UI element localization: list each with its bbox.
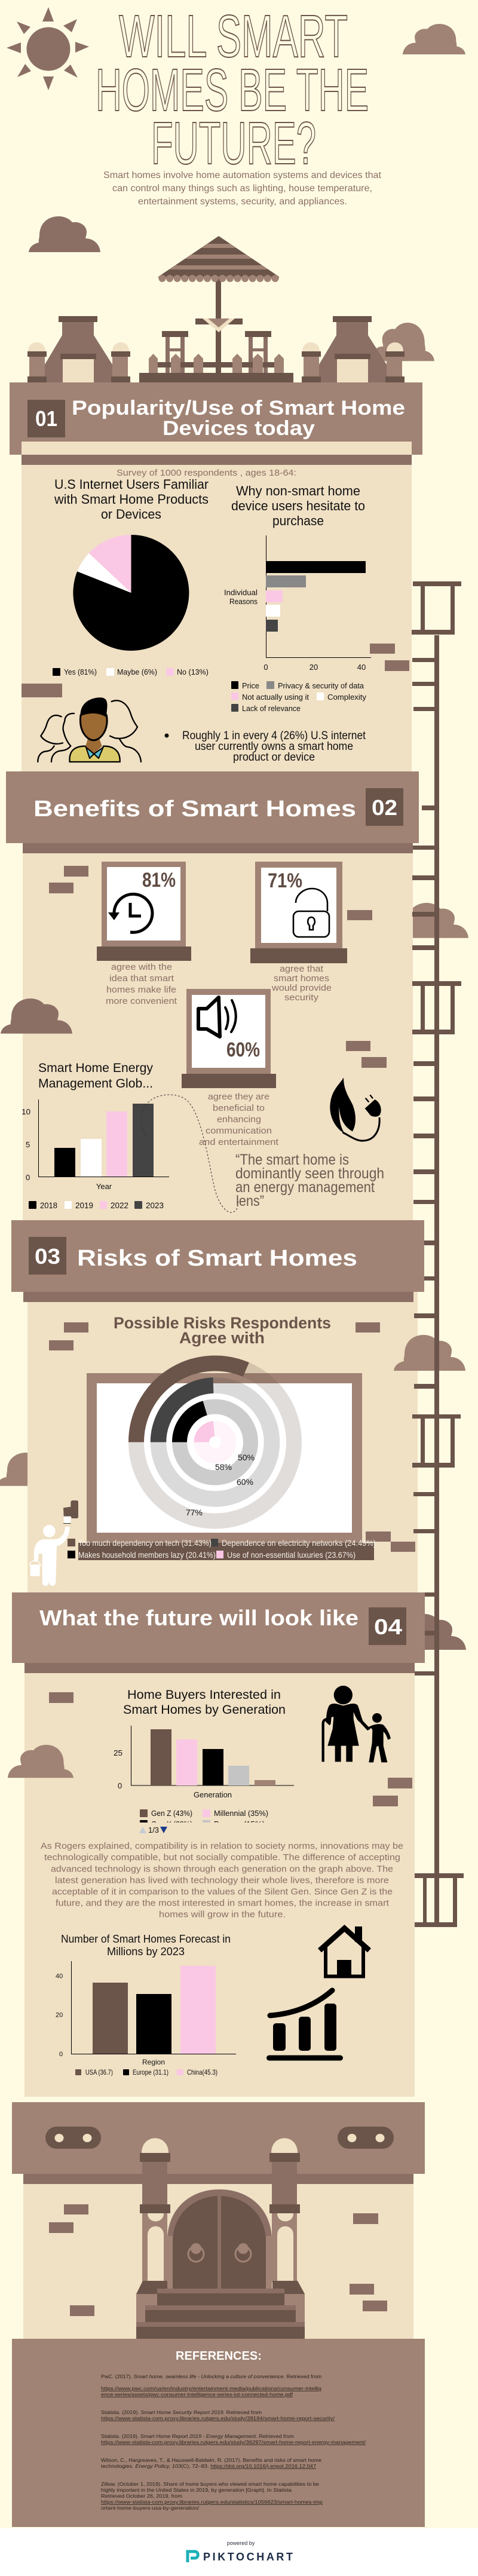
forecast chart legend: Europe (31.1) (133, 2068, 168, 2076)
door (167, 2189, 272, 2289)
risks heading: Agree with (179, 1329, 265, 1347)
quote: lens” (236, 1193, 264, 1209)
title: WILL SMART (119, 3, 348, 70)
bricks section 3 (49, 1322, 415, 1552)
generation chart legend: Boomer (15%) (214, 1820, 265, 1828)
pie legend: Yes (81%) (64, 667, 97, 676)
paragraph: compatibility: acceptable of it in comparison to the values of the Silent Gen. Since Gen Z is the (52, 1887, 393, 1897)
icon: clock (108, 894, 152, 932)
window: convenience 81% (97, 862, 191, 961)
generation chart legend (139, 1809, 268, 1834)
panel: references: Statista. (2019). Smart Home Report 2019 - Energy Management. Retrieved from (101, 2434, 294, 2439)
forecast chart title: Number of Smart Homes Forecast in (61, 1933, 231, 1945)
cloud behind wall 3 (0, 1453, 68, 1486)
forecast bar chart (56, 1961, 236, 2066)
text: entertainment (199, 1092, 279, 1147)
bar chart legend: Price (242, 681, 259, 690)
text: security (271, 964, 332, 1003)
window: convenience 81%: 81% (142, 869, 176, 892)
energy chart title (38, 1061, 154, 1091)
forecast chart legend: China(45.3) (187, 2068, 217, 2076)
panel: references: Retrieved October 26, 2019, from (101, 2494, 182, 2499)
bullet callout: Roughly 1 in every 4 (26%) U.S internet (182, 730, 366, 742)
panel: references: Statista. (2019). Smart Home Security Report 2019. Retrieved from (101, 2410, 262, 2415)
ornament vents (45, 2127, 394, 2149)
pillars (140, 2138, 300, 2282)
title (96, 3, 369, 177)
bar chart title: Why non-smart home (236, 483, 360, 498)
wall section 4 (24, 1663, 415, 2097)
wall section 1 (22, 442, 412, 776)
cloud left section 2 (1, 998, 72, 1034)
energy bar chart (22, 1099, 169, 1191)
forecast bar chart: Region (142, 2058, 165, 2066)
generation chart title (123, 1688, 286, 1717)
wall section 5 (23, 2174, 413, 2341)
bar chart: reasons: 40 (357, 663, 366, 672)
cloud behind right tower (370, 323, 434, 361)
panel: section 4 header: What the future will look like (39, 1606, 358, 1630)
icon: house (320, 1926, 369, 1978)
bar chart title (231, 483, 365, 528)
bricks section 5 (49, 2204, 387, 2316)
quote: dominantly seen through (235, 1165, 384, 1182)
energy chart legend (29, 1200, 164, 1210)
risks heading (114, 1314, 331, 1347)
intro text (103, 170, 382, 207)
text: security: would provide (271, 983, 332, 993)
radial chart legend: Makes household members lazy (20.41%) (78, 1550, 216, 1560)
text: security: agree that (280, 964, 324, 974)
right tower (302, 316, 405, 382)
table (195, 318, 243, 332)
panel: entrance (12, 2102, 425, 2339)
panel: references: ortant-home-buyers-usa-by-generation/ (101, 2505, 200, 2511)
icon: piktochart logo (188, 2552, 198, 2562)
energy chart title: Management Glob... (38, 1077, 153, 1091)
pie chart title: with Smart Home Products (54, 492, 209, 507)
window: entertainment 60%: 60% (226, 1039, 260, 1061)
dashed connector (142, 1095, 238, 1212)
panel: section 3 header: Risks of Smart Homes (77, 1246, 357, 1271)
generation chart legend: Millennial (35%) (214, 1809, 268, 1818)
panel: section 1 header: 01 (35, 406, 57, 431)
text: convenience: agree with the (111, 962, 172, 972)
cloud top right (403, 24, 465, 54)
bar chart: reasons: 0 (263, 663, 268, 672)
generation chart title: Home Buyers Interested in (127, 1688, 281, 1702)
energy chart legend: 2023 (146, 1200, 164, 1210)
powered by footer (188, 2540, 293, 2563)
bar chart legend (231, 681, 367, 713)
generation bar chart: Generation (194, 1790, 232, 1799)
icon: growth chart (266, 1990, 343, 2060)
generation bar chart: 0 (118, 1781, 122, 1790)
generation chart legend: Gen X (28%) (151, 1820, 192, 1828)
forecast chart title: Millions by 2023 (107, 1946, 185, 1958)
icon: sun (7, 7, 89, 90)
panel: references: https://www-statista-com.proxy.libraries.rutgers.edu/study/39184/smart-home-report-security/ (101, 2416, 335, 2421)
generation chart legend: 1/3 (148, 1825, 159, 1834)
panel: references: technologies. Energy Policy, 103 (C), 72–83. https://doi.org/10.1016/j.enpol.2016.12.047 (101, 2464, 317, 2469)
icon: grandmother and child (323, 1686, 391, 1762)
bullet callout: user currently owns a smart home (195, 740, 353, 753)
bar chart legend: Lack of relevance (242, 704, 301, 713)
bullet callout (165, 730, 366, 764)
energy bar chart: 5 (26, 1140, 30, 1149)
pie chart title: or Devices (101, 507, 161, 522)
text: entertainment: and entertainment (199, 1137, 279, 1147)
bullet callout: product or device (233, 751, 315, 764)
text: entertainment: enhancing (217, 1114, 261, 1125)
intro text: entertainment systems, security, and appliances. (138, 197, 347, 207)
panel: section 3 header (11, 1220, 424, 1302)
panel: references: https://www-statista-com.proxy.libraries.rutgers.edu/statistics/1056623/smart-homes-imp (101, 2500, 323, 2505)
radial bar chart: 50% (238, 1453, 255, 1462)
paragraph: compatibility: As Rogers explained, compatibility is in relation to society norms, innovations may be (41, 1841, 403, 1851)
steps (136, 2281, 305, 2339)
bar chart legend: Not actually using it (242, 693, 309, 702)
radial chart legend (68, 1538, 376, 1560)
panel: references (12, 2339, 425, 2527)
radial bar chart: 77% (186, 1508, 203, 1517)
panel: references: https://www.pwc.com/us/en/industry/entertainment-media/publications/consumer-intellig (101, 2386, 322, 2391)
stools (162, 331, 271, 373)
energy chart legend: 2019 (75, 1200, 93, 1210)
text: convenience: idea that smart (109, 973, 174, 984)
paragraph: compatibility (41, 1841, 403, 1919)
energy bar chart: Year (96, 1182, 112, 1191)
text: entertainment: communication (206, 1126, 272, 1136)
energy chart legend: 2022 (111, 1200, 128, 1210)
radial bar chart: 58% (215, 1462, 232, 1472)
panel: section 4 header (12, 1592, 425, 1673)
wall section 3 (27, 1292, 418, 1597)
bricks section 2 (49, 866, 387, 1068)
powered by footer: PIKTOCHART (203, 2551, 293, 2563)
left tower (27, 316, 130, 382)
panel: references: Zillow. (October 1, 2019). Share of home buyers who viewed smart home capabilities to be (101, 2482, 319, 2487)
rooftop patio with umbrella (139, 236, 293, 382)
paragraph: compatibility: homes will grow in the future. (159, 1910, 286, 1919)
window frame behind radial chart (87, 1373, 362, 1543)
panel: references: Wilson, C., Hargreaves, T., & Hauxwell-Baldwin, R. (2017). Benefits and risks of smart home (101, 2458, 321, 2463)
bar chart legend: Complexity (327, 693, 367, 702)
ladder and balconies (412, 581, 464, 1927)
survey text: Survey of 1000 respondents , ages 18-64: (117, 468, 296, 478)
forecast chart title (61, 1933, 231, 1958)
radial chart legend: Dependence on electricity networks (24.49%) (222, 1538, 376, 1548)
panel: section 1 header (10, 382, 422, 465)
forecast chart legend (75, 2068, 217, 2076)
forecast chart legend: USA (36.7) (85, 2068, 113, 2076)
text: security: smart homes (274, 973, 329, 984)
pie legend: Maybe (6%) (117, 667, 157, 676)
energy bar chart: 0 (26, 1173, 30, 1182)
generation chart title: Smart Homes by Generation (123, 1703, 286, 1717)
pie chart title: U.S Internet Users Familiar (54, 477, 209, 492)
bar chart: reasons (224, 535, 371, 672)
cloud left section 4 (8, 1745, 73, 1778)
radial bar chart (136, 1364, 294, 1521)
icon: leaf and plug (330, 1077, 381, 1141)
intro text: can control many things such as lighting, house temperature, (112, 183, 372, 194)
text: convenience: homes make life (106, 985, 176, 995)
umbrella (158, 236, 279, 373)
text: convenience: more convenient (106, 996, 177, 1006)
bar chart legend: Privacy & security of data (278, 681, 364, 690)
pie chart title (54, 477, 209, 522)
title: FUTURE? (151, 110, 316, 177)
paragraph: compatibility: latest generation has lived with technology their whole lives, therefore is more (55, 1875, 389, 1886)
patio base (139, 373, 293, 382)
forecast bar chart: 40 (56, 1973, 63, 1980)
risks heading: Possible Risks Respondents (114, 1314, 331, 1332)
radial chart legend: Too much dependency on tech (31.43%) (78, 1538, 212, 1548)
quote: an energy management (235, 1179, 375, 1196)
panel: section 1 header: Popularity/Use of Smart Home (72, 397, 405, 419)
panel: section 4 header: 04 (374, 1615, 402, 1639)
text: entertainment: agree they are (208, 1092, 269, 1102)
cloud behind wall 2 (397, 903, 468, 938)
panel: references: highly important in the United States in 2019, by generation [Graph]. In Statista. (101, 2488, 293, 2493)
forecast bar chart: 20 (56, 2011, 63, 2018)
panel: references: REFERENCES: (176, 2350, 262, 2363)
bar chart: reasons: Individual (224, 588, 258, 597)
energy chart legend: 2018 (40, 1200, 57, 1210)
pie legend (53, 667, 209, 676)
powered by footer: powered by (227, 2540, 255, 2546)
quote: “The smart home is (235, 1151, 349, 1168)
bar chart title: device users hesitate to (231, 498, 365, 513)
paragraph: compatibility: advanced technology is shown through each generation on the graph above. The (51, 1864, 393, 1874)
icon: open padlock (293, 889, 329, 937)
forecast bar chart: 0 (59, 2051, 63, 2058)
panel: section 2 header: 02 (372, 795, 397, 820)
panel: references: ence-series/assets/pwc-consumer-intelligence-series-iot-connected-home.pdf (101, 2392, 293, 2397)
radial bar chart: 60% (237, 1477, 253, 1487)
panel: section 1 header: Devices today (163, 417, 315, 440)
pie legend: No (13%) (177, 667, 209, 676)
bricks section 1 (22, 644, 409, 697)
bar chart: reasons: Reasons (229, 597, 258, 606)
icon: people (38, 698, 141, 762)
text: security: security (284, 993, 319, 1003)
icon: painter (29, 1500, 78, 1586)
text: convenience (106, 962, 177, 1006)
paragraph: compatibility: future, and they are the most interested in smart homes, the increase in smart (56, 1898, 390, 1909)
panel: references: https://www-statista-com.proxy.libraries.rutgers.edu/study/36297/smart-home-report-energy-management/ (101, 2440, 366, 2445)
bricks section 4 (49, 1692, 412, 1806)
generation bar chart (114, 1726, 294, 1799)
panel: section 2 header: Benefits of Smart Homes (33, 797, 356, 822)
pie chart (73, 535, 189, 651)
panel: references: PwC. (2017). Smart home, seamless life - Unlocking a culture of convenience. Retrieved from (101, 2374, 321, 2379)
fence (149, 354, 284, 373)
window: security 71%: 71% (268, 869, 302, 892)
generation chart legend: Gen Z (43%) (151, 1809, 192, 1818)
quote (235, 1151, 384, 1209)
radial chart legend: Use of non-essential luxuries (23.67%) (227, 1550, 356, 1560)
bar chart: reasons: 20 (310, 663, 318, 672)
window: security 71% (250, 862, 347, 963)
window: entertainment 60% (182, 989, 276, 1088)
icon: speaker (198, 997, 236, 1037)
cloud left (29, 216, 100, 252)
wall section 2 (23, 843, 413, 1226)
panel: section 2 header (6, 771, 419, 853)
energy chart title: Smart Home Energy (38, 1061, 154, 1075)
generation bar chart: 25 (114, 1748, 122, 1757)
bar chart title: purchase (272, 513, 324, 528)
energy bar chart: 10 (22, 1107, 30, 1116)
paragraph: compatibility: technologically compatible, but not socially compatible. The difference of accepting (44, 1852, 400, 1863)
panel: section 3 header: 03 (35, 1244, 60, 1269)
intro text: Smart homes involve home automation systems and devices that (103, 170, 382, 180)
text: entertainment: beneficial to (213, 1103, 265, 1113)
cloud right section 4 (394, 1614, 466, 1650)
cloud right section 3 (394, 1335, 465, 1371)
